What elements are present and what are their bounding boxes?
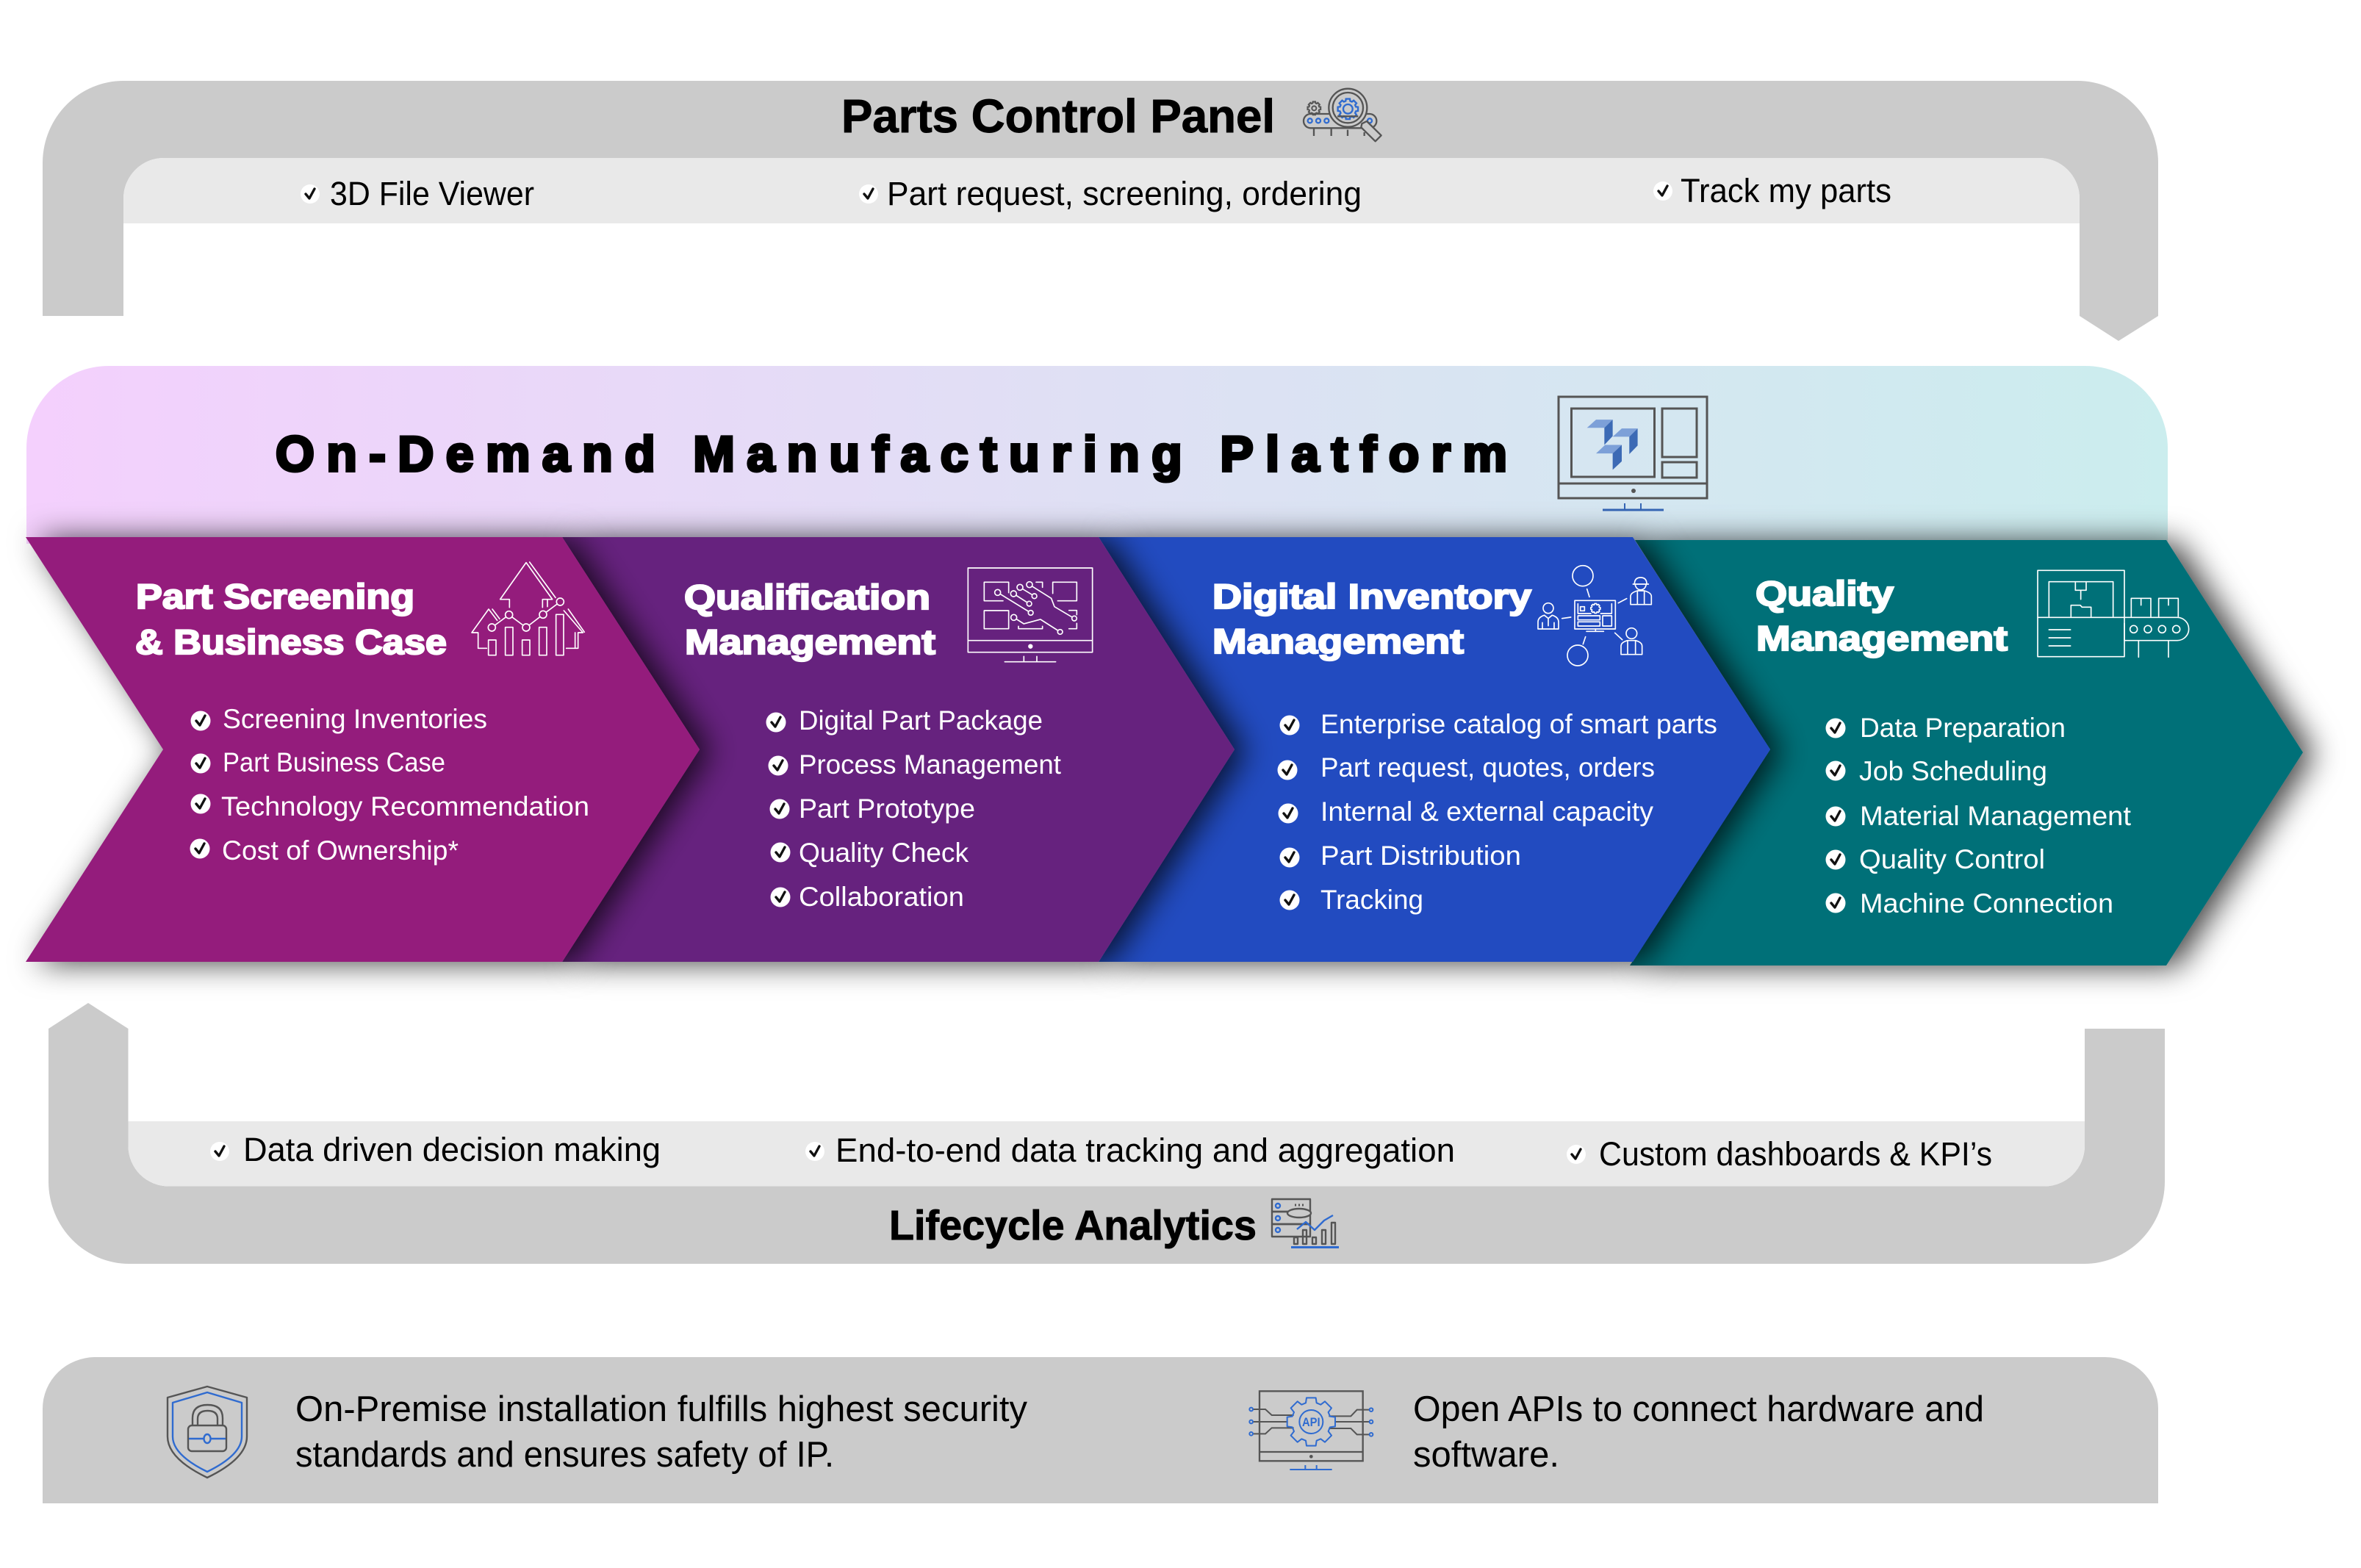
icon: conveyor and magnifier (1304, 89, 1381, 141)
icon: factory conveyor (2038, 570, 2189, 657)
item: 3D File Viewer: 3D File Viewer (330, 175, 534, 212)
item: internal and external capacity: Internal & external capacity (1320, 796, 1654, 827)
icon: houses with bar chart (472, 562, 584, 655)
item: machine connection: Machine Connection (1860, 888, 2113, 918)
heading: parts control panel: Parts Control Panel (841, 90, 1275, 143)
item: tracking: Tracking (1320, 885, 1423, 915)
item: technology recommendation: Technology Recommendation (221, 791, 589, 821)
panel: parts control panel (43, 81, 2158, 341)
text: on-premise security: standards and ensures safety of IP. (295, 1435, 834, 1475)
panel: lifecycle analytics (48, 1003, 2165, 1264)
heading: quality management: Quality (1756, 574, 1894, 613)
heading: part screening: & Business Case (135, 622, 447, 661)
heading: digital inventory management (1212, 577, 1531, 661)
chevron: qualification management (562, 537, 1235, 962)
lifecycle analytics feature strip (128, 1121, 2085, 1187)
chevron: digital inventory management (1099, 537, 1770, 962)
panel: chevron process (26, 537, 2303, 965)
item: enterprise catalog: Enterprise catalog of smart parts (1320, 709, 1717, 739)
icon: API gear monitor (1249, 1391, 1373, 1470)
icon: API gear monitor: API (1302, 1415, 1320, 1429)
heading: platform: On-Demand Manufacturing Platform (276, 426, 1507, 482)
text: open APIs (1413, 1389, 1984, 1475)
heading: lifecycle analytics: Lifecycle Analytics (889, 1202, 1257, 1249)
item: part business case: Part Business Case (223, 747, 445, 777)
item: process management: Process Management (799, 749, 1062, 780)
item: part prototype: Part Prototype (799, 794, 975, 824)
panel: on-demand manufacturing platform header (26, 366, 2168, 544)
item: part request quotes orders: Part request, quotes, orders (1320, 752, 1655, 783)
item: part distribution: Part Distribution (1320, 841, 1521, 871)
text: on-premise security: On-Premise installation fulfills highest security (295, 1389, 1027, 1429)
parts control panel feature strip (123, 158, 2080, 223)
item: custom dashboards: Custom dashboards & KPI’s (1599, 1135, 1992, 1173)
item: job scheduling: Job Scheduling (1859, 756, 2047, 786)
panel content: qualification management (684, 568, 1093, 912)
text: on-premise security (295, 1389, 1027, 1475)
item: end-to-end data tracking: End-to-end data tracking and aggregation (835, 1132, 1455, 1169)
heading: quality management (1756, 574, 2008, 658)
heading: digital inventory management: Management (1212, 622, 1464, 661)
item: material management: Material Management (1860, 801, 2132, 831)
parts control panel arrow band (43, 81, 2158, 341)
item: track my parts: Track my parts (1681, 172, 1891, 209)
text: open APIs: Open APIs to connect hardware and (1413, 1389, 1984, 1429)
item: data preparation: Data Preparation (1860, 713, 2066, 743)
item: digital part package: Digital Part Package (799, 705, 1043, 736)
heading: qualification management: Management (685, 622, 935, 661)
lifecycle analytics arrow band (48, 1003, 2165, 1264)
panel content: part screening and business case (135, 562, 589, 866)
heading: part screening (135, 577, 447, 661)
panel content: quality management (1756, 570, 2189, 918)
item: cost of ownership: Cost of Ownership* (222, 835, 459, 866)
heading: qualification management: Qualification (684, 578, 930, 616)
heading: digital inventory management: Digital Inventory (1212, 577, 1531, 616)
chevron: quality management (1630, 540, 2303, 965)
panel content: digital inventory management (1212, 566, 1717, 915)
icon: security shield (168, 1387, 247, 1478)
chevron: part screening (26, 537, 700, 962)
item: screening inventories: Screening Inventories (223, 704, 487, 734)
item: data driven decision making: Data driven decision making (243, 1131, 661, 1168)
item: part request: Part request, screening, ordering (887, 175, 1362, 212)
bottom panel background (43, 1357, 2158, 1503)
text: open APIs: software. (1413, 1435, 1559, 1475)
icon: monitor with logo (1559, 397, 1707, 510)
heading: part screening: Part Screening (136, 577, 414, 616)
icon: monitor with circuit (968, 568, 1093, 662)
icon: network of people around monitor (1538, 566, 1651, 666)
icon: server and chart (1272, 1199, 1339, 1248)
heading: quality management: Management (1756, 619, 2008, 658)
panel: on-premise and open APIs (43, 1357, 2158, 1503)
item: quality control: Quality Control (1859, 844, 2045, 874)
heading: qualification management (684, 578, 935, 661)
platform gradient background (26, 366, 2168, 544)
item: quality check: Quality Check (799, 838, 969, 868)
item: collaboration: Collaboration (799, 882, 964, 912)
